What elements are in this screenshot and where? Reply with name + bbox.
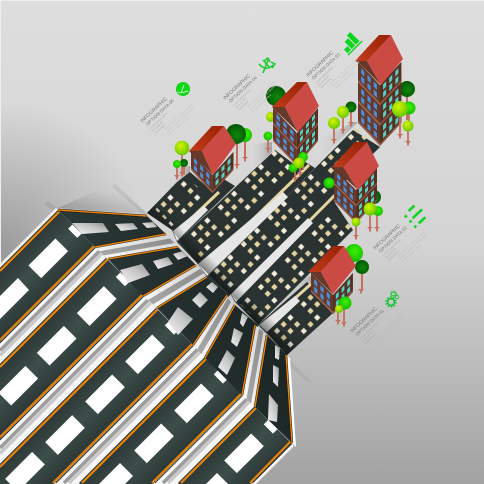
converging road strips (58, 210, 296, 447)
label: option data 05: INFOGRAPHIC (139, 96, 169, 124)
label: option data 03: adipiscing elit sed do eiusmod (329, 56, 359, 85)
label: option data 05: tempor incididunt ut labore et (165, 106, 195, 133)
label: option data 03: OPTION DATA 03 (311, 52, 341, 81)
label: option data 04: consectetur (236, 99, 250, 112)
label: option data 02: consectetur (386, 249, 400, 262)
label: option data 04: dolore magna aliqua (251, 93, 272, 113)
label: option data 01 (349, 296, 408, 354)
label: option data 05: OPTION DATA 05 (145, 98, 175, 127)
house shadows (174, 122, 358, 292)
label: option data 05 (139, 86, 198, 144)
label: option data 05: consectetur (153, 122, 167, 135)
label: option data 04: adipiscing elit sed do eiusmod (246, 79, 276, 108)
city street medians (173, 165, 335, 332)
label: option data 02 (372, 213, 431, 271)
trees in front of houses (173, 101, 416, 327)
house 04 (272, 82, 319, 166)
label: option data 05: dolore magna aliqua (168, 116, 189, 136)
label: option data 01: Lorem ipsum dolor (359, 321, 378, 340)
label: option data 04: tempor incididunt ut labore et (248, 83, 278, 110)
label: option data 02: dolore magna aliqua (401, 243, 422, 263)
label: option data 03: tempor incididunt ut labore et (331, 60, 361, 87)
label: option data 03: INFOGRAPHIC (305, 50, 335, 78)
label: option data 04: INFOGRAPHIC (222, 73, 252, 101)
label: option data 01: adipiscing elit sed do eiusmod (373, 312, 403, 341)
icon: pie chart (176, 82, 190, 96)
icon: gears (386, 291, 399, 307)
label: option data 01: consectetur (363, 332, 377, 345)
label: option data 03 (305, 40, 364, 98)
ridge shadow over city streets (147, 147, 380, 355)
house 02 (332, 142, 379, 223)
city streets with lit window dots (147, 127, 380, 355)
label: option data 02: OPTION DATA 02 (378, 225, 408, 254)
icon: bar chart (338, 31, 363, 56)
label: option data 01: OPTION DATA 01 (355, 308, 385, 337)
label: option data 03: dolore magna aliqua (334, 70, 355, 90)
label: option data 04: OPTION DATA 04 (228, 75, 258, 104)
label: option data 05: Lorem ipsum dolor (149, 111, 168, 130)
label: option data 02: adipiscing elit sed do eiusmod (396, 229, 426, 258)
house 01 (308, 246, 356, 314)
label: option data 05: sit amet elit (151, 120, 164, 133)
label: option data 03: sit amet elit (317, 74, 330, 87)
label: option data 01: sit amet elit (361, 330, 374, 343)
label: option data 05: adipiscing elit sed do eiusmod (163, 102, 193, 131)
label: option data 04: sit amet elit (234, 97, 247, 110)
label: option data 03: Lorem ipsum dolor (315, 65, 334, 84)
label: option data 03: consectetur (319, 76, 333, 89)
house 05 (189, 126, 236, 193)
icon: dashed list (403, 203, 428, 228)
label: option data 01: INFOGRAPHIC (349, 306, 379, 334)
label: option data 04 (222, 63, 281, 121)
label: option data 02: Lorem ipsum dolor (382, 238, 401, 257)
house 03 (355, 35, 403, 146)
label: option data 01: dolore magna aliqua (378, 326, 399, 346)
road bands: wide foreground roads (0, 208, 294, 484)
label: option data 04: Lorem ipsum dolor (232, 88, 251, 107)
label: option data 02: sit amet elit (384, 247, 397, 260)
trees behind houses (226, 81, 415, 294)
label: option data 01: tempor incididunt ut labore et (375, 316, 405, 343)
label: option data 02: tempor incididunt ut labore et (398, 233, 428, 260)
icon: crossing arrows (259, 58, 275, 73)
label: option data 02: INFOGRAPHIC (372, 223, 402, 251)
